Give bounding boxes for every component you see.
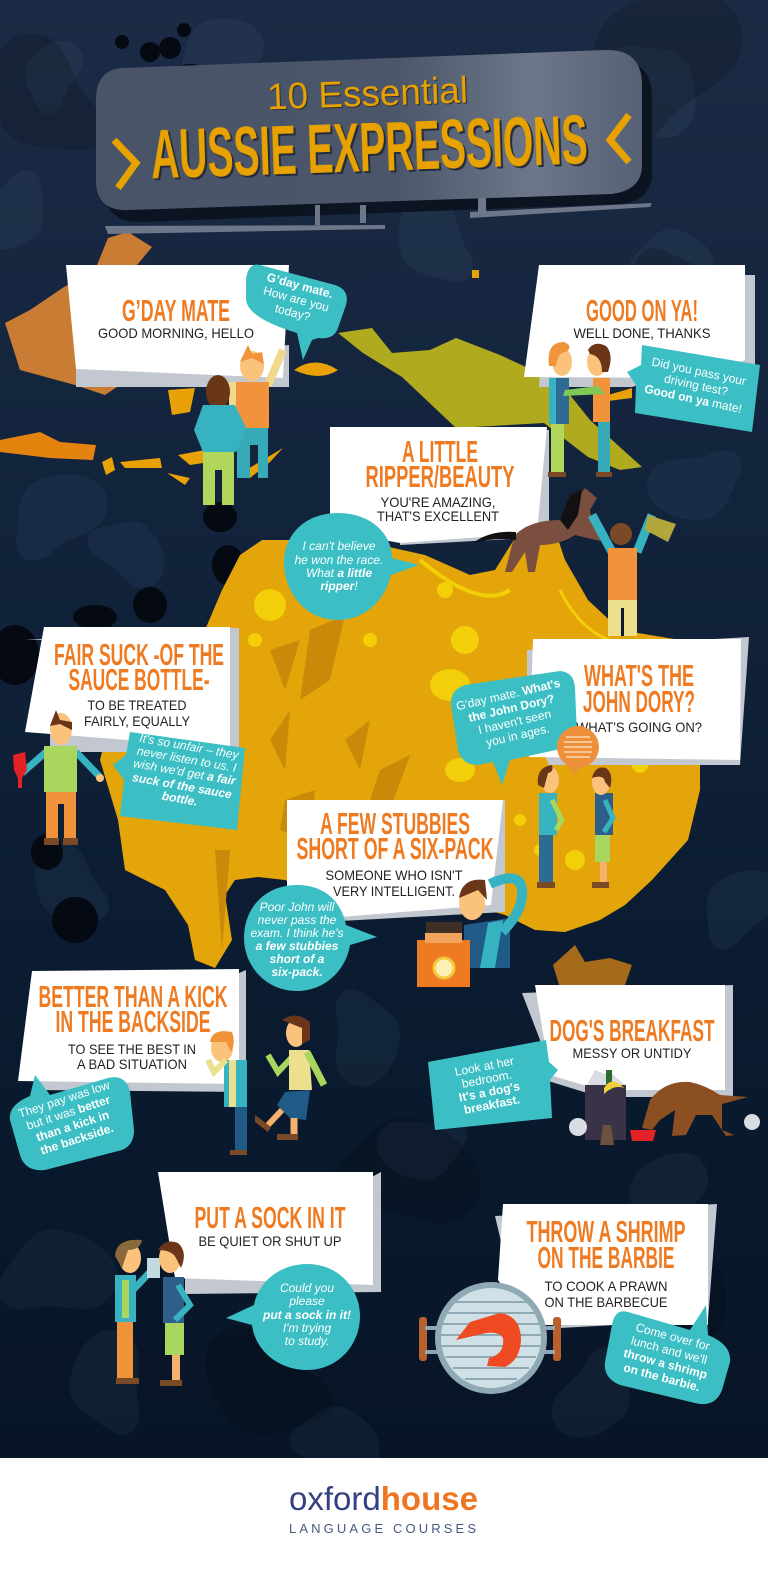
bubble text: six-pack.	[271, 965, 323, 979]
card: G'day mate	[66, 265, 289, 387]
speech bubble: Throw a shrimp	[605, 1305, 730, 1404]
figures: Good on ya pair	[548, 342, 612, 477]
card: Fair suck	[25, 627, 239, 752]
bubble text: on the barbie.	[622, 1360, 702, 1394]
bubble text: the backside.	[39, 1121, 115, 1158]
bubble text: he won the race.	[295, 553, 383, 567]
right chevron	[610, 115, 629, 162]
heading	[296, 806, 494, 866]
heading	[366, 434, 515, 494]
meaning: BE QUIET OR SHUT UP	[198, 1233, 342, 1249]
map: Australia	[100, 505, 700, 968]
figures: Put a sock in it pair	[115, 1240, 190, 1386]
heading: FAIR SUCK -OF THE	[54, 637, 224, 672]
bubble text: today?	[273, 301, 312, 324]
bubble text: short of a	[270, 952, 325, 966]
card: A little ripper	[330, 427, 549, 545]
footer	[0, 1458, 768, 1573]
bubble text: ripper!	[320, 579, 358, 593]
title line 1: 10 Essential	[266, 70, 469, 118]
heading: RIPPER/BEAUTY	[366, 459, 515, 494]
bubble text: I'm trying	[283, 1321, 331, 1335]
bubble text: How are you	[262, 284, 331, 315]
speech bubble: Better than a kick	[10, 1075, 134, 1170]
speech bubble: Fair suck	[113, 731, 245, 830]
bubble text: put a sock in it!	[262, 1308, 351, 1322]
heading: A FEW STUBBIES	[320, 806, 470, 841]
bubble text: I can't believe	[302, 539, 376, 553]
figure: man with betting slip	[592, 515, 676, 636]
meaning: YOU'RE AMAZING,	[380, 494, 496, 510]
speech bubble: Put a sock in it	[226, 1264, 360, 1370]
bubble text: lunch and we'll	[629, 1333, 709, 1367]
bubble text: Come over for	[634, 1320, 711, 1353]
bubble text: I haven't seen	[477, 707, 552, 737]
bubble text	[643, 354, 749, 416]
heading: SAUCE BOTTLE-	[68, 662, 210, 697]
bubble text: than a kick in	[34, 1107, 111, 1144]
bubble text: It's a dog's	[458, 1079, 521, 1105]
card: Throw a shrimp	[495, 1204, 717, 1328]
bubble text	[258, 270, 335, 328]
bubble text: never listen to us. I	[136, 744, 238, 775]
figure: man scratching head	[459, 878, 522, 968]
bubble text: Poor John will	[260, 900, 335, 914]
bubble text: bedroom.	[461, 1067, 513, 1091]
card: Better than a kick	[18, 969, 246, 1092]
bubble text: bottle.	[161, 789, 199, 809]
bubble text: never pass the	[258, 913, 337, 927]
heading	[526, 1214, 686, 1275]
bubble text: Did you pass your	[651, 355, 747, 388]
meaning	[544, 1278, 668, 1310]
title panel	[96, 50, 652, 234]
bubble text: driving test?	[663, 372, 729, 399]
speech bubble: Few stubbies	[244, 885, 377, 991]
bubble text: Good on ya mate!	[643, 382, 743, 416]
bubble text: exam. I think he's	[250, 926, 344, 940]
bubble text: a few stubbies	[256, 939, 339, 953]
bubble text: It's so unfair – they	[138, 731, 241, 762]
speech bubble: A little ripper	[284, 513, 419, 620]
map: Tasmania	[553, 945, 632, 988]
map: New Guinea	[338, 328, 642, 470]
meaning: WELL DONE, THANKS	[574, 325, 710, 341]
heading: SHORT OF A SIX-PACK	[296, 831, 494, 866]
icon: rubbish bin	[569, 1070, 626, 1145]
speech bubble: Dog's breakfast	[428, 1040, 558, 1130]
bubble text: What a little	[306, 566, 372, 580]
icon: six-pack of beer	[417, 922, 470, 987]
heading: A LITTLE	[402, 434, 478, 469]
speech bubble: Good on ya	[627, 345, 760, 432]
logo tagline: LANGUAGE COURSES	[289, 1521, 476, 1536]
bubble text: Look at her	[454, 1054, 515, 1079]
meaning	[377, 494, 499, 524]
figures: G'day mate pair	[194, 345, 283, 505]
bubble text: G'day mate. What's	[455, 676, 562, 713]
left chevron	[114, 140, 136, 188]
figure: dog	[630, 1082, 760, 1141]
speech bubble: G'day mate	[246, 265, 347, 360]
meaning	[84, 697, 191, 729]
ink splatters	[0, 23, 244, 943]
bubble text	[262, 1281, 351, 1348]
bubble text: but it was better	[25, 1092, 112, 1133]
icon: orange speech bubble	[557, 726, 599, 775]
card: John Dory	[527, 637, 749, 765]
meaning: TO SEE THE BEST IN	[68, 1041, 196, 1057]
meaning: MESSY OR UNTIDY	[572, 1045, 692, 1061]
meaning: A BAD SITUATION	[77, 1056, 187, 1072]
icon: sauce bottle	[13, 752, 27, 788]
bubble text: breakfast.	[463, 1092, 521, 1117]
bubble text	[128, 731, 243, 815]
bubble text: G’day mate.	[265, 270, 335, 301]
bubble text: to study.	[285, 1334, 329, 1348]
bubble text: suck of the sauce	[131, 770, 233, 802]
bubble text	[250, 900, 344, 979]
bubble text: They pay was low	[16, 1078, 112, 1121]
map: Indonesian islands	[0, 270, 632, 485]
bubble text: please	[288, 1294, 325, 1308]
heading: PUT A SOCK IN IT	[194, 1200, 346, 1235]
bubble text: the John Dory?	[467, 691, 556, 725]
card: Good on ya	[524, 265, 755, 387]
bubble text	[455, 676, 572, 754]
bubble text: wish we'd get a fair	[132, 756, 238, 788]
heading: WHAT'S THE	[584, 658, 694, 693]
meaning: WHAT'S GOING ON?	[576, 719, 702, 735]
figure: horse	[473, 488, 608, 572]
bubble text	[295, 539, 383, 593]
meaning: FAIRLY, EQUALLY	[84, 713, 191, 729]
meaning: THAT'S EXCELLENT	[377, 508, 499, 524]
bubble text: you in ages.	[485, 721, 551, 750]
heading	[38, 979, 228, 1039]
icon: barbecue with shrimp	[419, 1282, 561, 1394]
bubble text: throw a shrimp	[622, 1346, 709, 1382]
figure: man with sauce bottle	[13, 710, 104, 845]
figure: man coughing	[208, 1031, 247, 1155]
bubble text	[16, 1078, 125, 1161]
shrimp	[456, 1313, 521, 1367]
meaning: VERY INTELLIGENT.	[333, 883, 455, 899]
heading: BETTER THAN A KICK	[38, 979, 228, 1014]
bubble text	[618, 1319, 716, 1395]
meaning	[326, 867, 463, 899]
speech bubble: John Dory	[451, 671, 577, 785]
meaning: SOMEONE WHO ISN'T	[326, 867, 463, 883]
meaning	[68, 1041, 196, 1072]
heading: IN THE BACKSIDE	[56, 1004, 210, 1039]
card: Put a sock in it	[158, 1172, 381, 1294]
meaning: ON THE BARBECUE	[544, 1294, 668, 1310]
card: Dog's breakfast	[522, 985, 733, 1097]
logo wordmark: oxfordhouse	[289, 1480, 478, 1517]
map: Borneo	[5, 232, 152, 395]
figures: John Dory pair	[537, 765, 613, 888]
figure: man walking	[255, 1015, 324, 1140]
meaning: GOOD MORNING, HELLO	[98, 325, 254, 341]
heading	[54, 637, 224, 697]
bubble text	[453, 1054, 524, 1117]
heading: G’DAY MATE	[122, 293, 230, 328]
card: Few stubbies	[287, 800, 505, 921]
meaning: TO BE TREATED	[88, 697, 186, 713]
meaning: TO COOK A PRAWN	[544, 1278, 668, 1294]
heading	[583, 658, 695, 719]
bubble text: Could you	[280, 1281, 334, 1295]
